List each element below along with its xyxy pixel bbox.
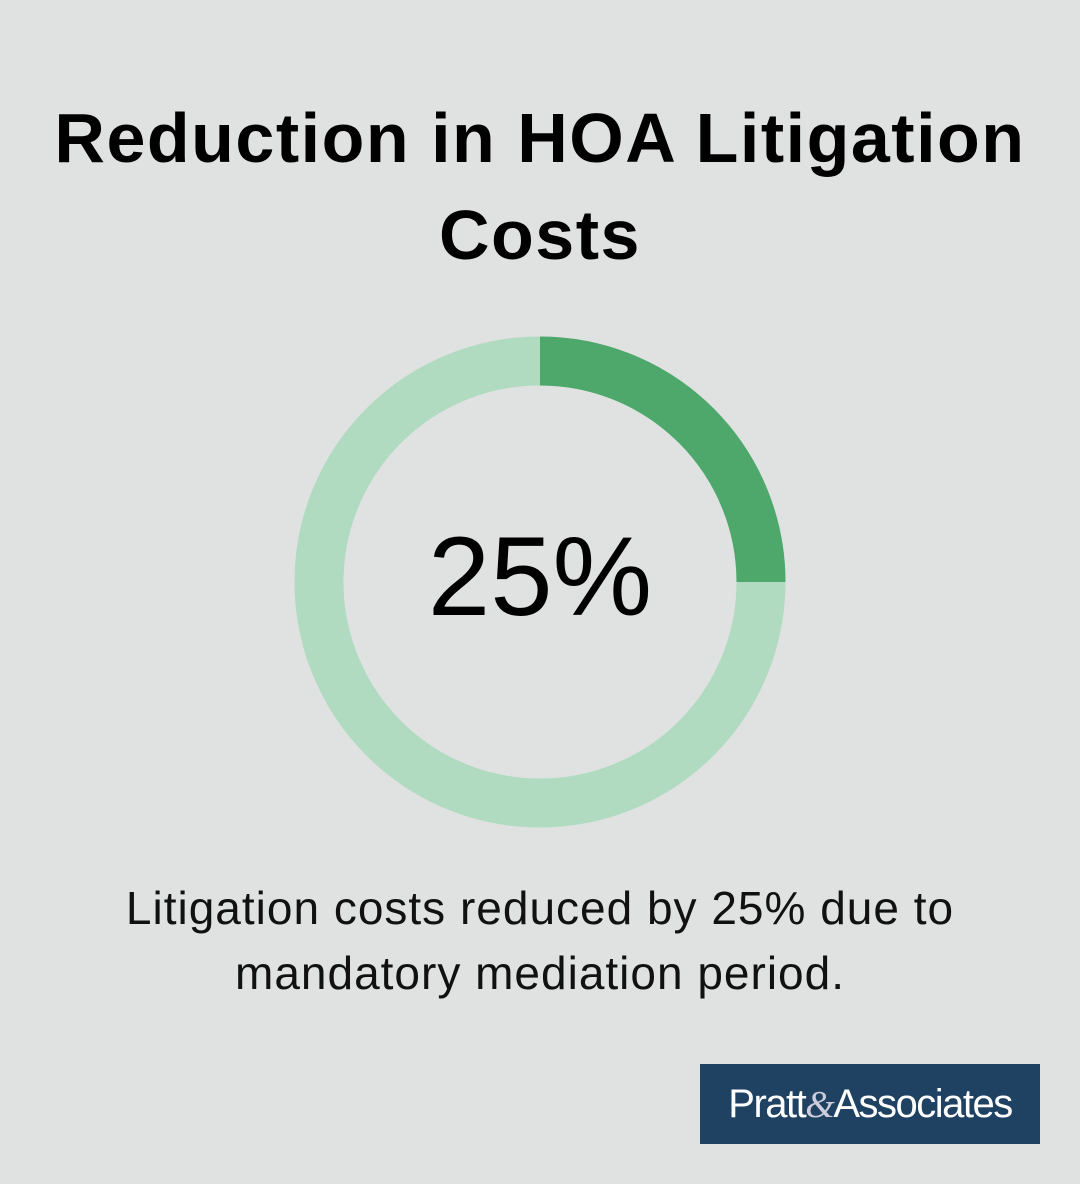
logo bbox=[700, 1064, 1040, 1144]
logo: Pratt&Associates bbox=[728, 1082, 1012, 1126]
title: Reduction in HOA Litigation bbox=[54, 99, 1026, 177]
caption: Litigation costs reduced by 25% due to bbox=[126, 882, 954, 934]
caption: mandatory mediation period. bbox=[235, 947, 845, 999]
title bbox=[54, 99, 1026, 274]
title: Costs bbox=[439, 196, 641, 274]
center value: 25% bbox=[428, 514, 652, 639]
caption bbox=[126, 882, 954, 999]
